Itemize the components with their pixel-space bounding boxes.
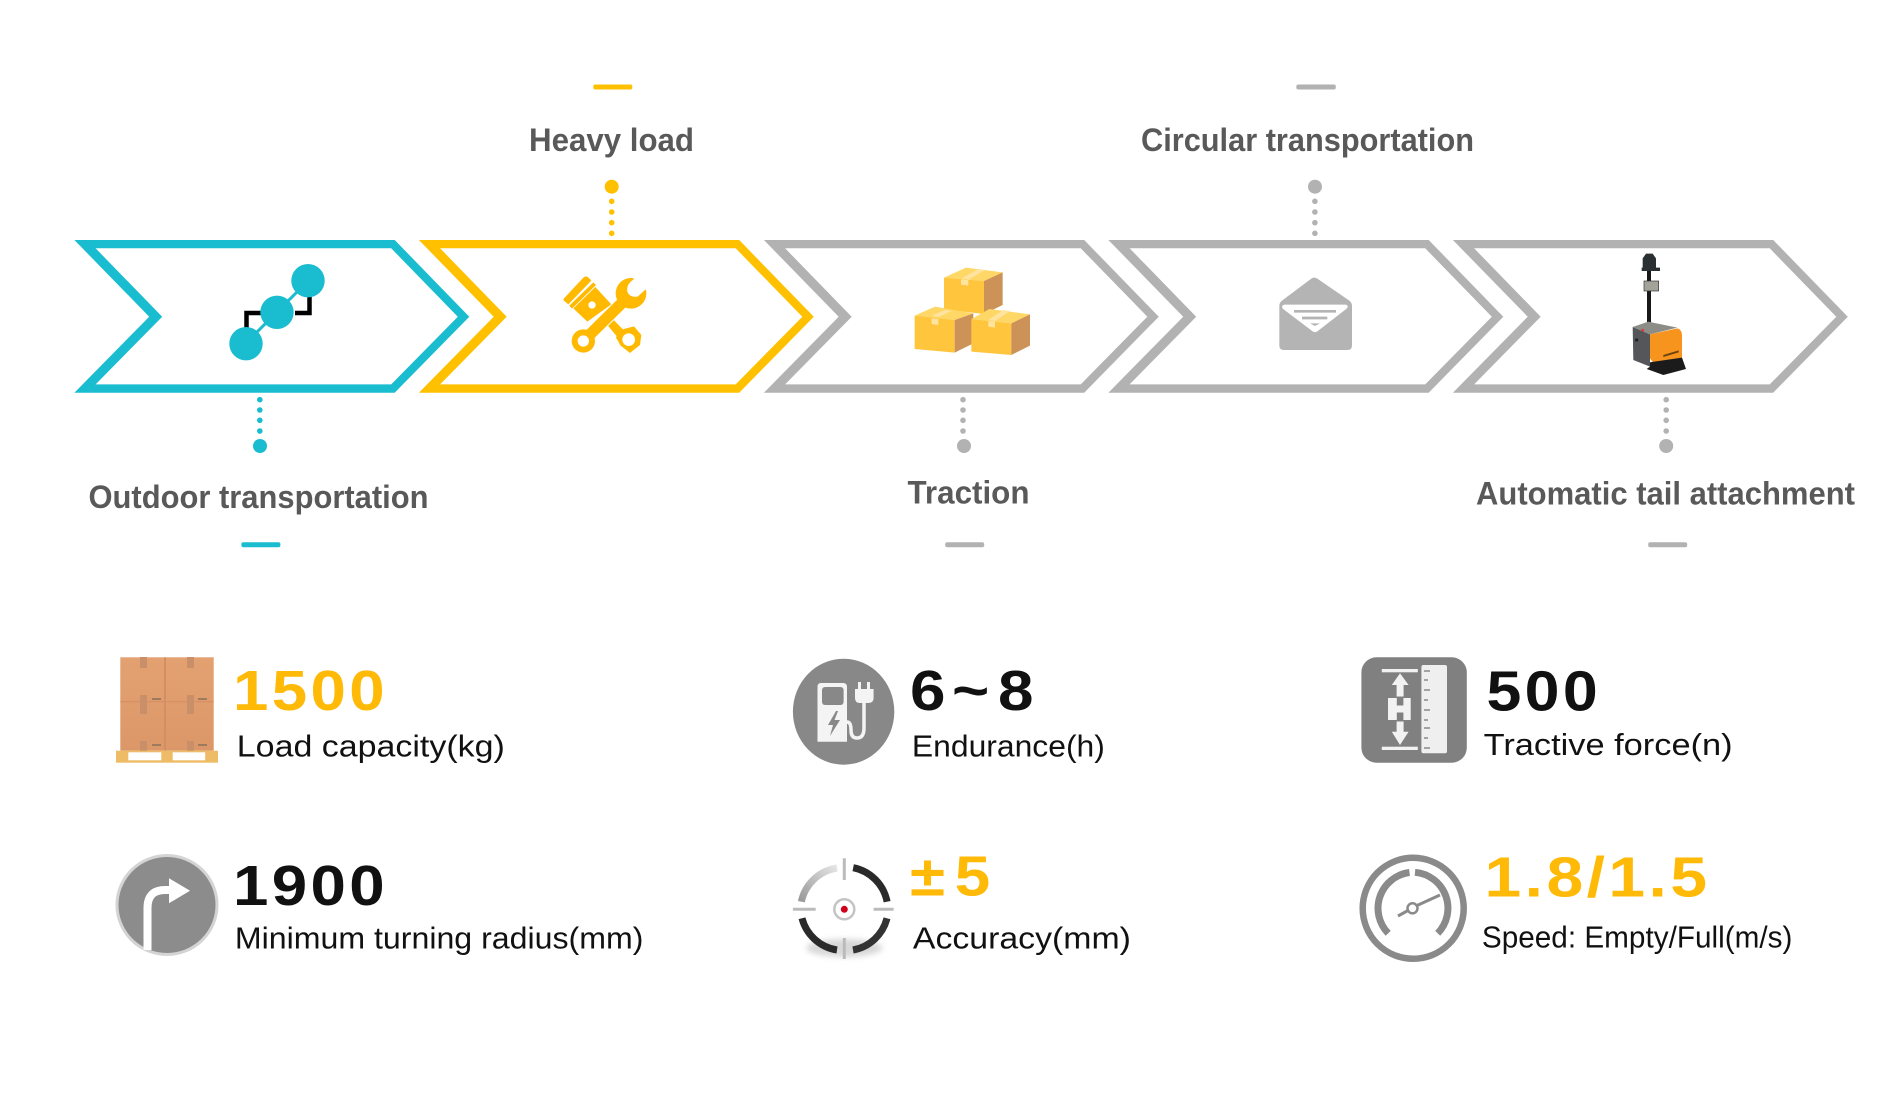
stat label: load capacity: Load capacity(kg) [237,729,505,764]
stat value: endurance: 6~8 [910,658,1034,722]
connector: outdoor transportation [253,397,267,453]
accent dash: outdoor transportation [241,542,280,547]
chevron: circular transportation [1108,240,1503,393]
chevron: automatic tail attachment [1453,240,1848,393]
heading: heavy load: Heavy load [529,122,694,158]
chevron: outdoor transportation [74,240,469,393]
stat label: tractive force: Tractive force(n) [1484,727,1733,762]
icon: open envelope [1279,278,1352,350]
stat label: speed: Speed: Empty/Full(m/s) [1482,919,1792,954]
stat label: minimum turning radius: Minimum turning radius(mm) [235,920,643,955]
accent dash: automatic tail attachment [1648,542,1687,547]
stat value: accuracy: ±5 [910,844,990,908]
icon: height ruler [1361,657,1467,763]
chevron: traction [764,240,1159,393]
accent dash: traction [945,542,984,547]
icon: accuracy target [793,858,894,959]
stat value: load capacity: 1500 [233,659,388,723]
stat value: speed: 1.8/1.5 [1484,846,1710,910]
connector: heavy load [605,180,619,236]
icon: right turn sign [117,856,217,954]
stat value: tractive force: 500 [1486,660,1601,724]
icon: speed gauge [1363,858,1464,959]
accent dash: heavy load [593,84,632,90]
stat label: accuracy: Accuracy(mm) [913,920,1131,955]
stat label: endurance: Endurance(h) [912,729,1105,764]
heading: circular transportation: Circular transportation [1141,122,1474,158]
chevron: heavy load [419,240,814,393]
stat value: minimum turning radius: 1900 [233,854,388,918]
icon: charging station [793,659,894,765]
connector: automatic tail attachment [1659,397,1673,453]
heading: automatic tail attachment: Automatic tail attachment [1476,476,1855,512]
icon: cartons on pallet [116,657,218,763]
heading: outdoor transportation: Outdoor transportation [88,479,428,515]
accent dash: circular transportation [1296,84,1336,90]
icon: piston and wrench [563,272,653,353]
heading: traction: Traction [908,474,1030,510]
icon: stacked boxes [915,268,1030,355]
icon: connected route dots [229,264,325,360]
connector: circular transportation [1308,180,1322,236]
connector: traction [957,397,971,453]
icon: robot with mast [1633,254,1686,375]
